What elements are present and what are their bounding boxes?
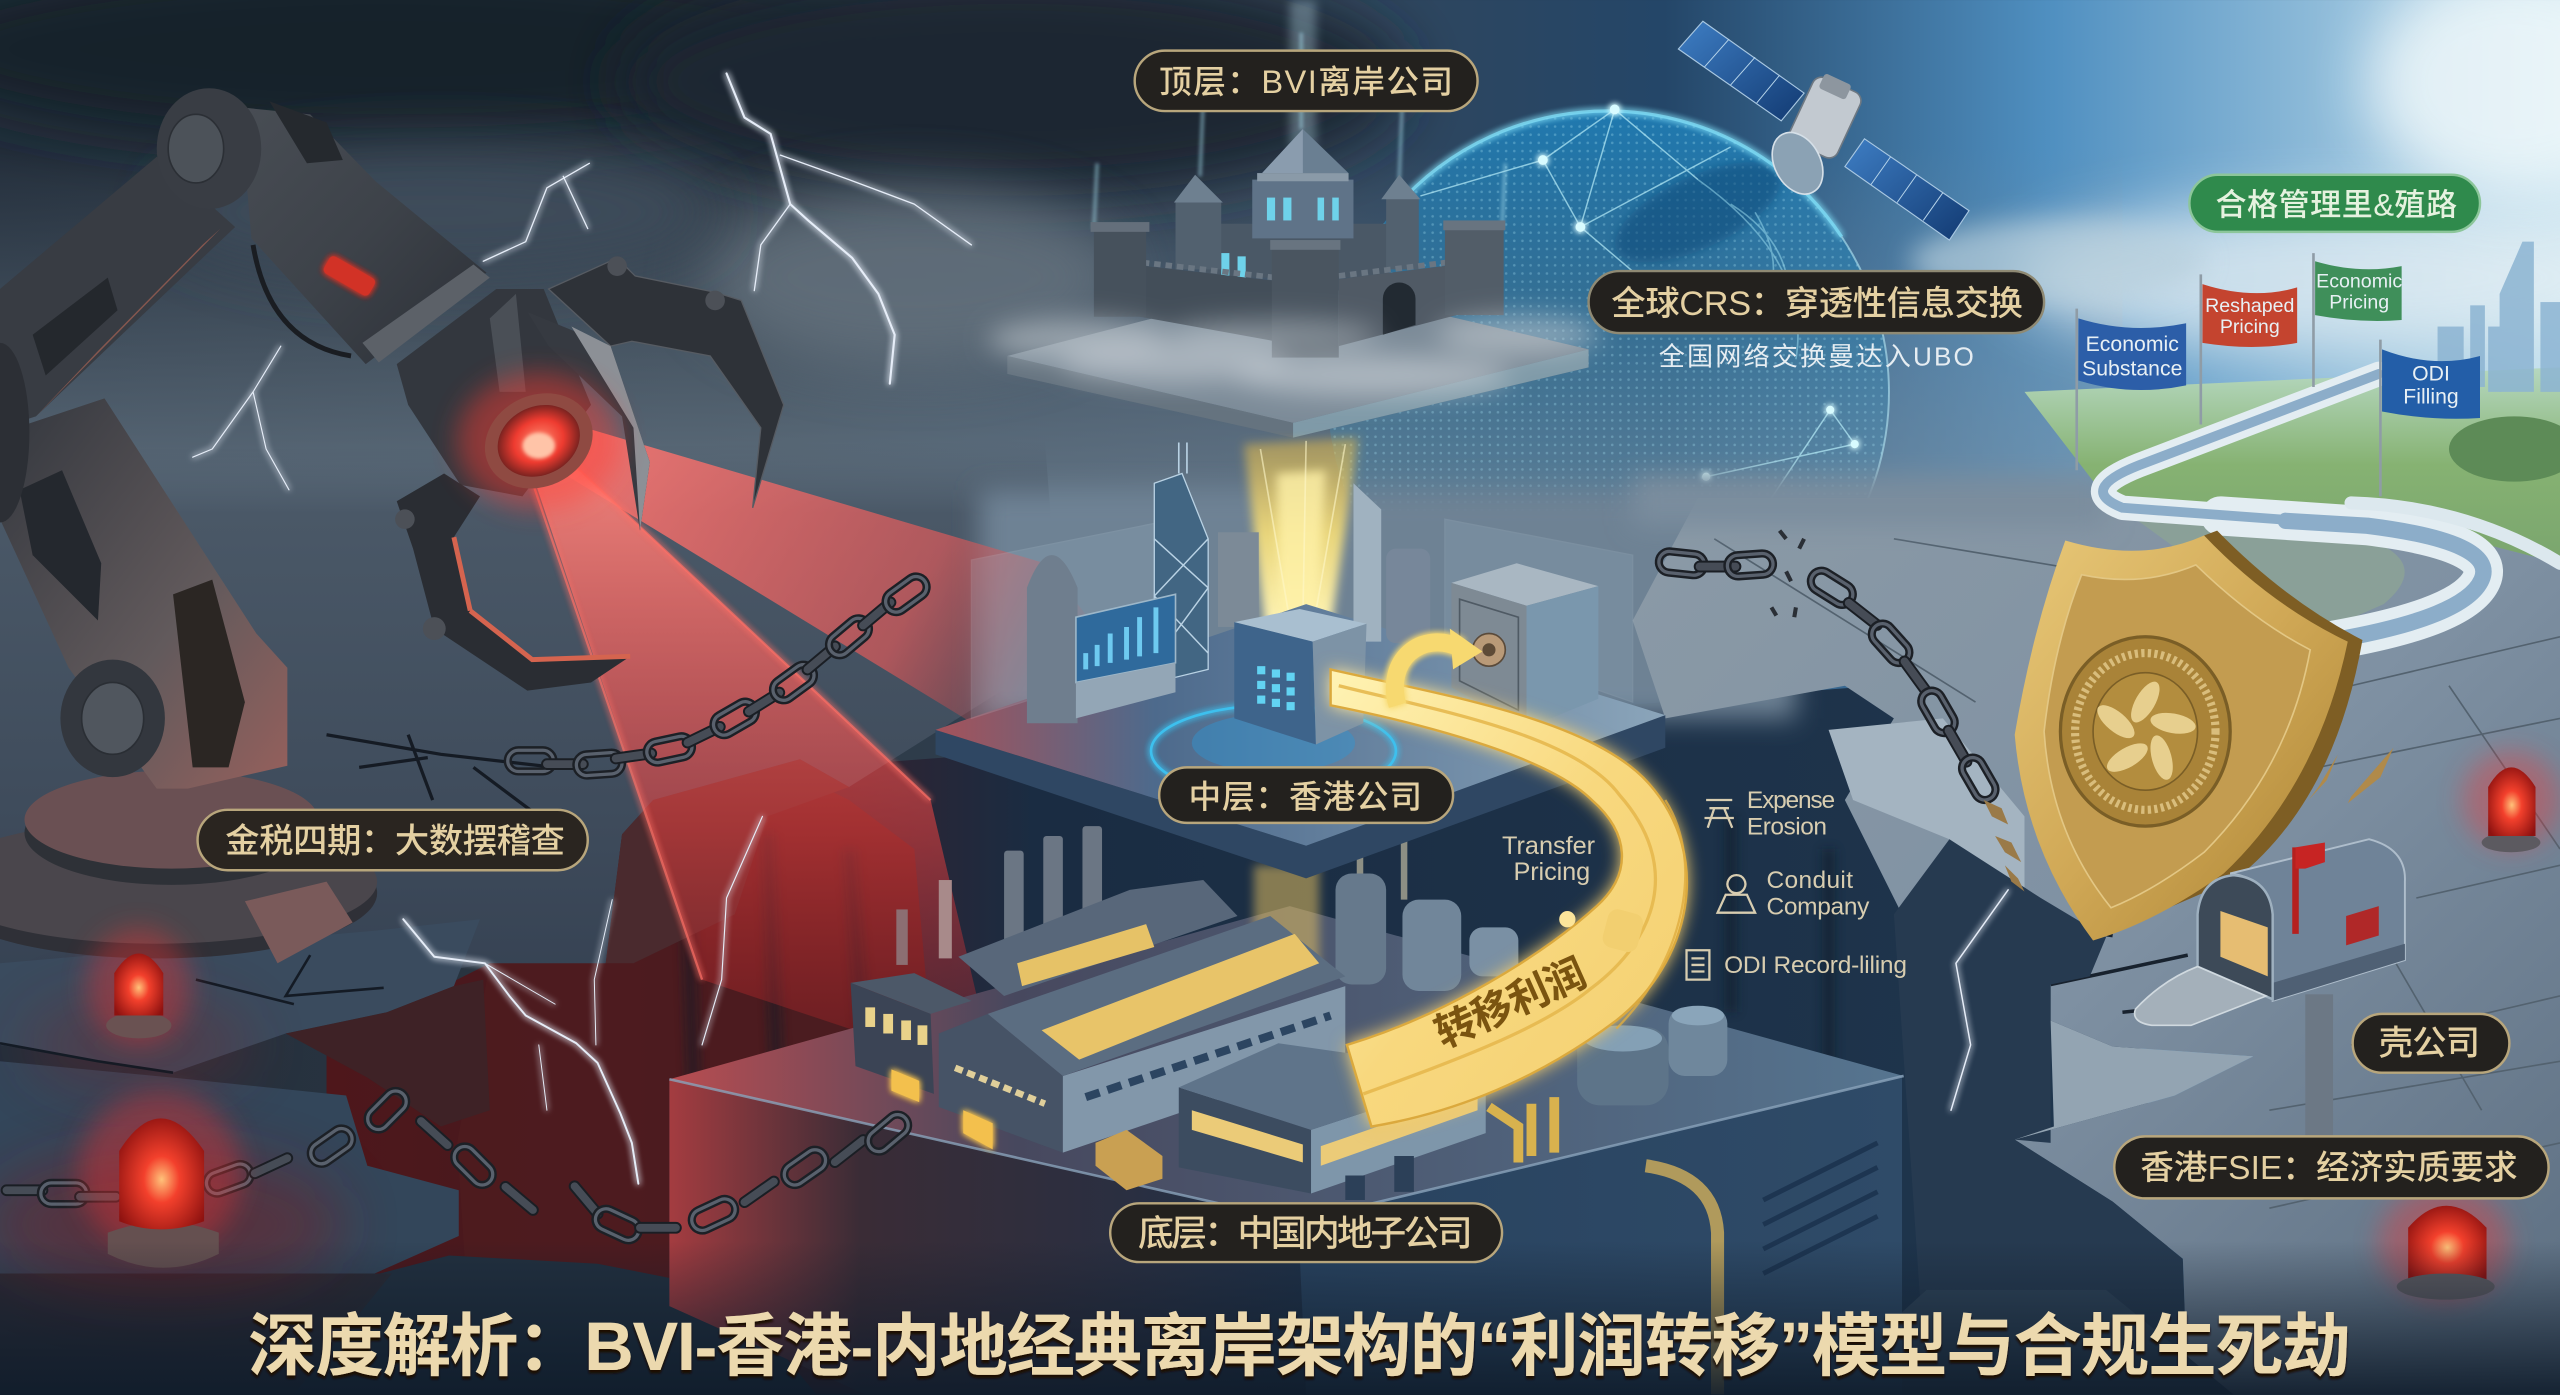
- gold shield flakes: [2309, 748, 2393, 803]
- label: shell company: 壳公司: [2379, 1025, 2480, 1063]
- flag: ODI Filling: [2380, 340, 2480, 496]
- annotation: conduit company: Conduit: [1767, 867, 1853, 894]
- label: top layer BVI: 顶层：BVI离岸公司: [1159, 63, 1453, 100]
- rear building: [958, 880, 1238, 996]
- icon: erosion: [1704, 800, 1734, 828]
- chain: upper left: [508, 572, 931, 776]
- annotation: transfer pricing: Pricing: [1513, 858, 1590, 886]
- icon: conduit person: [1718, 875, 1755, 913]
- gold shield: [2015, 531, 2362, 940]
- alarm light: right lower: [2379, 1185, 2509, 1303]
- flag: Reshaped Pricing: Pricing: [2220, 316, 2280, 338]
- glass panels: [971, 519, 1633, 718]
- flag: Economic Substance: [2077, 309, 2186, 470]
- Hong Kong emblem medal: [2060, 637, 2230, 826]
- main building: [939, 916, 1345, 1153]
- right pavement: [1633, 477, 2560, 1394]
- mid horizon ground: [980, 490, 1796, 718]
- gold boxes: [1096, 1130, 1162, 1190]
- label: compliance strategy: [2189, 175, 2480, 232]
- label: Golden Tax IV: [198, 810, 588, 870]
- tanks behind: [1336, 833, 1518, 991]
- left ground rock: [0, 441, 1061, 1045]
- robot lower arm: [0, 398, 287, 789]
- bottom vignette: [0, 1241, 2560, 1395]
- golden beam down to Hong Kong: [1244, 438, 1358, 629]
- red scanning beams: [532, 421, 1143, 1078]
- label: middle layer Hong Kong: 中层：香港公司: [1189, 778, 1422, 815]
- front building: [1179, 1043, 1486, 1200]
- flag: Reshaped Pricing: Reshaped: [2205, 295, 2294, 317]
- transfer profit text: 转移利润: [1428, 950, 1593, 1057]
- glowing cube: [1234, 609, 1367, 745]
- label: bottom layer mainland: 底层：中国内地子公司: [1138, 1213, 1473, 1254]
- annotation: transfer pricing: [1502, 832, 1595, 886]
- top platform: BVI: [1007, 281, 1589, 438]
- Hong Kong skyline: [1027, 442, 1430, 723]
- chain: lower left broken: [2, 1087, 912, 1244]
- flag: Economic Substance: Substance: [2082, 358, 2182, 381]
- label: middle layer Hong Kong: [1159, 767, 1453, 823]
- annotation: conduit company: Company: [1767, 893, 1870, 920]
- chain: upper right broken: [1658, 531, 2024, 891]
- factory complex: [851, 826, 1727, 1394]
- annotation: expense erosion: [1704, 787, 1835, 840]
- flag: ODI Filling: Filling: [2403, 385, 2459, 408]
- chasm: [327, 686, 2188, 1394]
- bottom-left rocks: [0, 919, 816, 1394]
- label: Hong Kong FSIE: [2114, 1136, 2549, 1198]
- flag: Economic Pricing: Pricing: [2329, 292, 2389, 314]
- gold bars: [1489, 1097, 1554, 1162]
- flag: ODI Filling: ODI: [2412, 362, 2450, 385]
- annotation: conduit company: [1718, 867, 1870, 920]
- gold pipe: [1646, 1166, 1718, 1394]
- bottom platform: mainland: [669, 906, 1904, 1394]
- left building: [851, 973, 971, 1102]
- satellite icon: [1678, 21, 1969, 240]
- annotation: ODI record filing: ODI Record-liling: [1724, 952, 1907, 979]
- alarm light: left small: [87, 927, 191, 1045]
- castle: [1091, 33, 1505, 358]
- robot forearm: [157, 88, 490, 364]
- flag: Economic Substance: Economic: [2086, 333, 2179, 356]
- annotation: transfer pricing: Transfer: [1502, 832, 1595, 860]
- text: CRS subtitle: 全国网络交换曼达入UBO: [1659, 342, 1974, 372]
- robot base: [0, 771, 377, 963]
- label: global CRS: 全球CRS：穿透性信息交换: [1611, 285, 2023, 323]
- label: top layer BVI: [1135, 51, 1478, 111]
- cloud mist around castle: [988, 315, 1600, 395]
- flag: Economic Pricing: Economic: [2316, 270, 2402, 292]
- annotation: expense erosion: Erosion: [1747, 813, 1827, 840]
- safe: [1451, 563, 1598, 728]
- annotation: expense erosion: Expense: [1747, 787, 1835, 814]
- lightning bolts: [193, 73, 2008, 1184]
- flag: Reshaped Pricing: [2201, 274, 2297, 425]
- icon: document: [1687, 950, 1709, 980]
- right tanks: [1577, 1006, 1727, 1105]
- gold profit stream arrow: [1331, 629, 1687, 1127]
- chimneys: [896, 826, 1102, 965]
- gold sparks: [1254, 865, 1319, 980]
- robot gripper head: [397, 289, 591, 496]
- title: 深度解析：BVI-香港-内地经典离岸架构的“利润转移”模型与合规生死劫: [248, 1308, 2351, 1385]
- robot upper arm: [0, 157, 235, 522]
- label: Hong Kong FSIE: 香港FSIE：经济实质要求: [2140, 1150, 2518, 1187]
- robot arm: [0, 88, 784, 963]
- alarm light: right upper: [2462, 751, 2560, 852]
- label: Golden Tax IV: 金税四期：大数摆稽查: [225, 822, 565, 860]
- middle platform: Hong Kong: [936, 442, 1665, 878]
- mailbox: [2135, 839, 2405, 1141]
- label: global CRS: [1589, 271, 2044, 333]
- globe network: [1327, 105, 1889, 673]
- alarm light: left large: [78, 1091, 242, 1268]
- robot claws: [395, 256, 784, 691]
- label: shell company: [2353, 1014, 2509, 1073]
- label: compliance strategy: 合格管理里&殖路: [2216, 188, 2457, 223]
- green field, road and skyline: [2024, 242, 2560, 640]
- red sensor lens: [457, 372, 620, 509]
- flag: Economic Pricing: [2313, 253, 2402, 387]
- label: bottom layer mainland: [1110, 1203, 1502, 1262]
